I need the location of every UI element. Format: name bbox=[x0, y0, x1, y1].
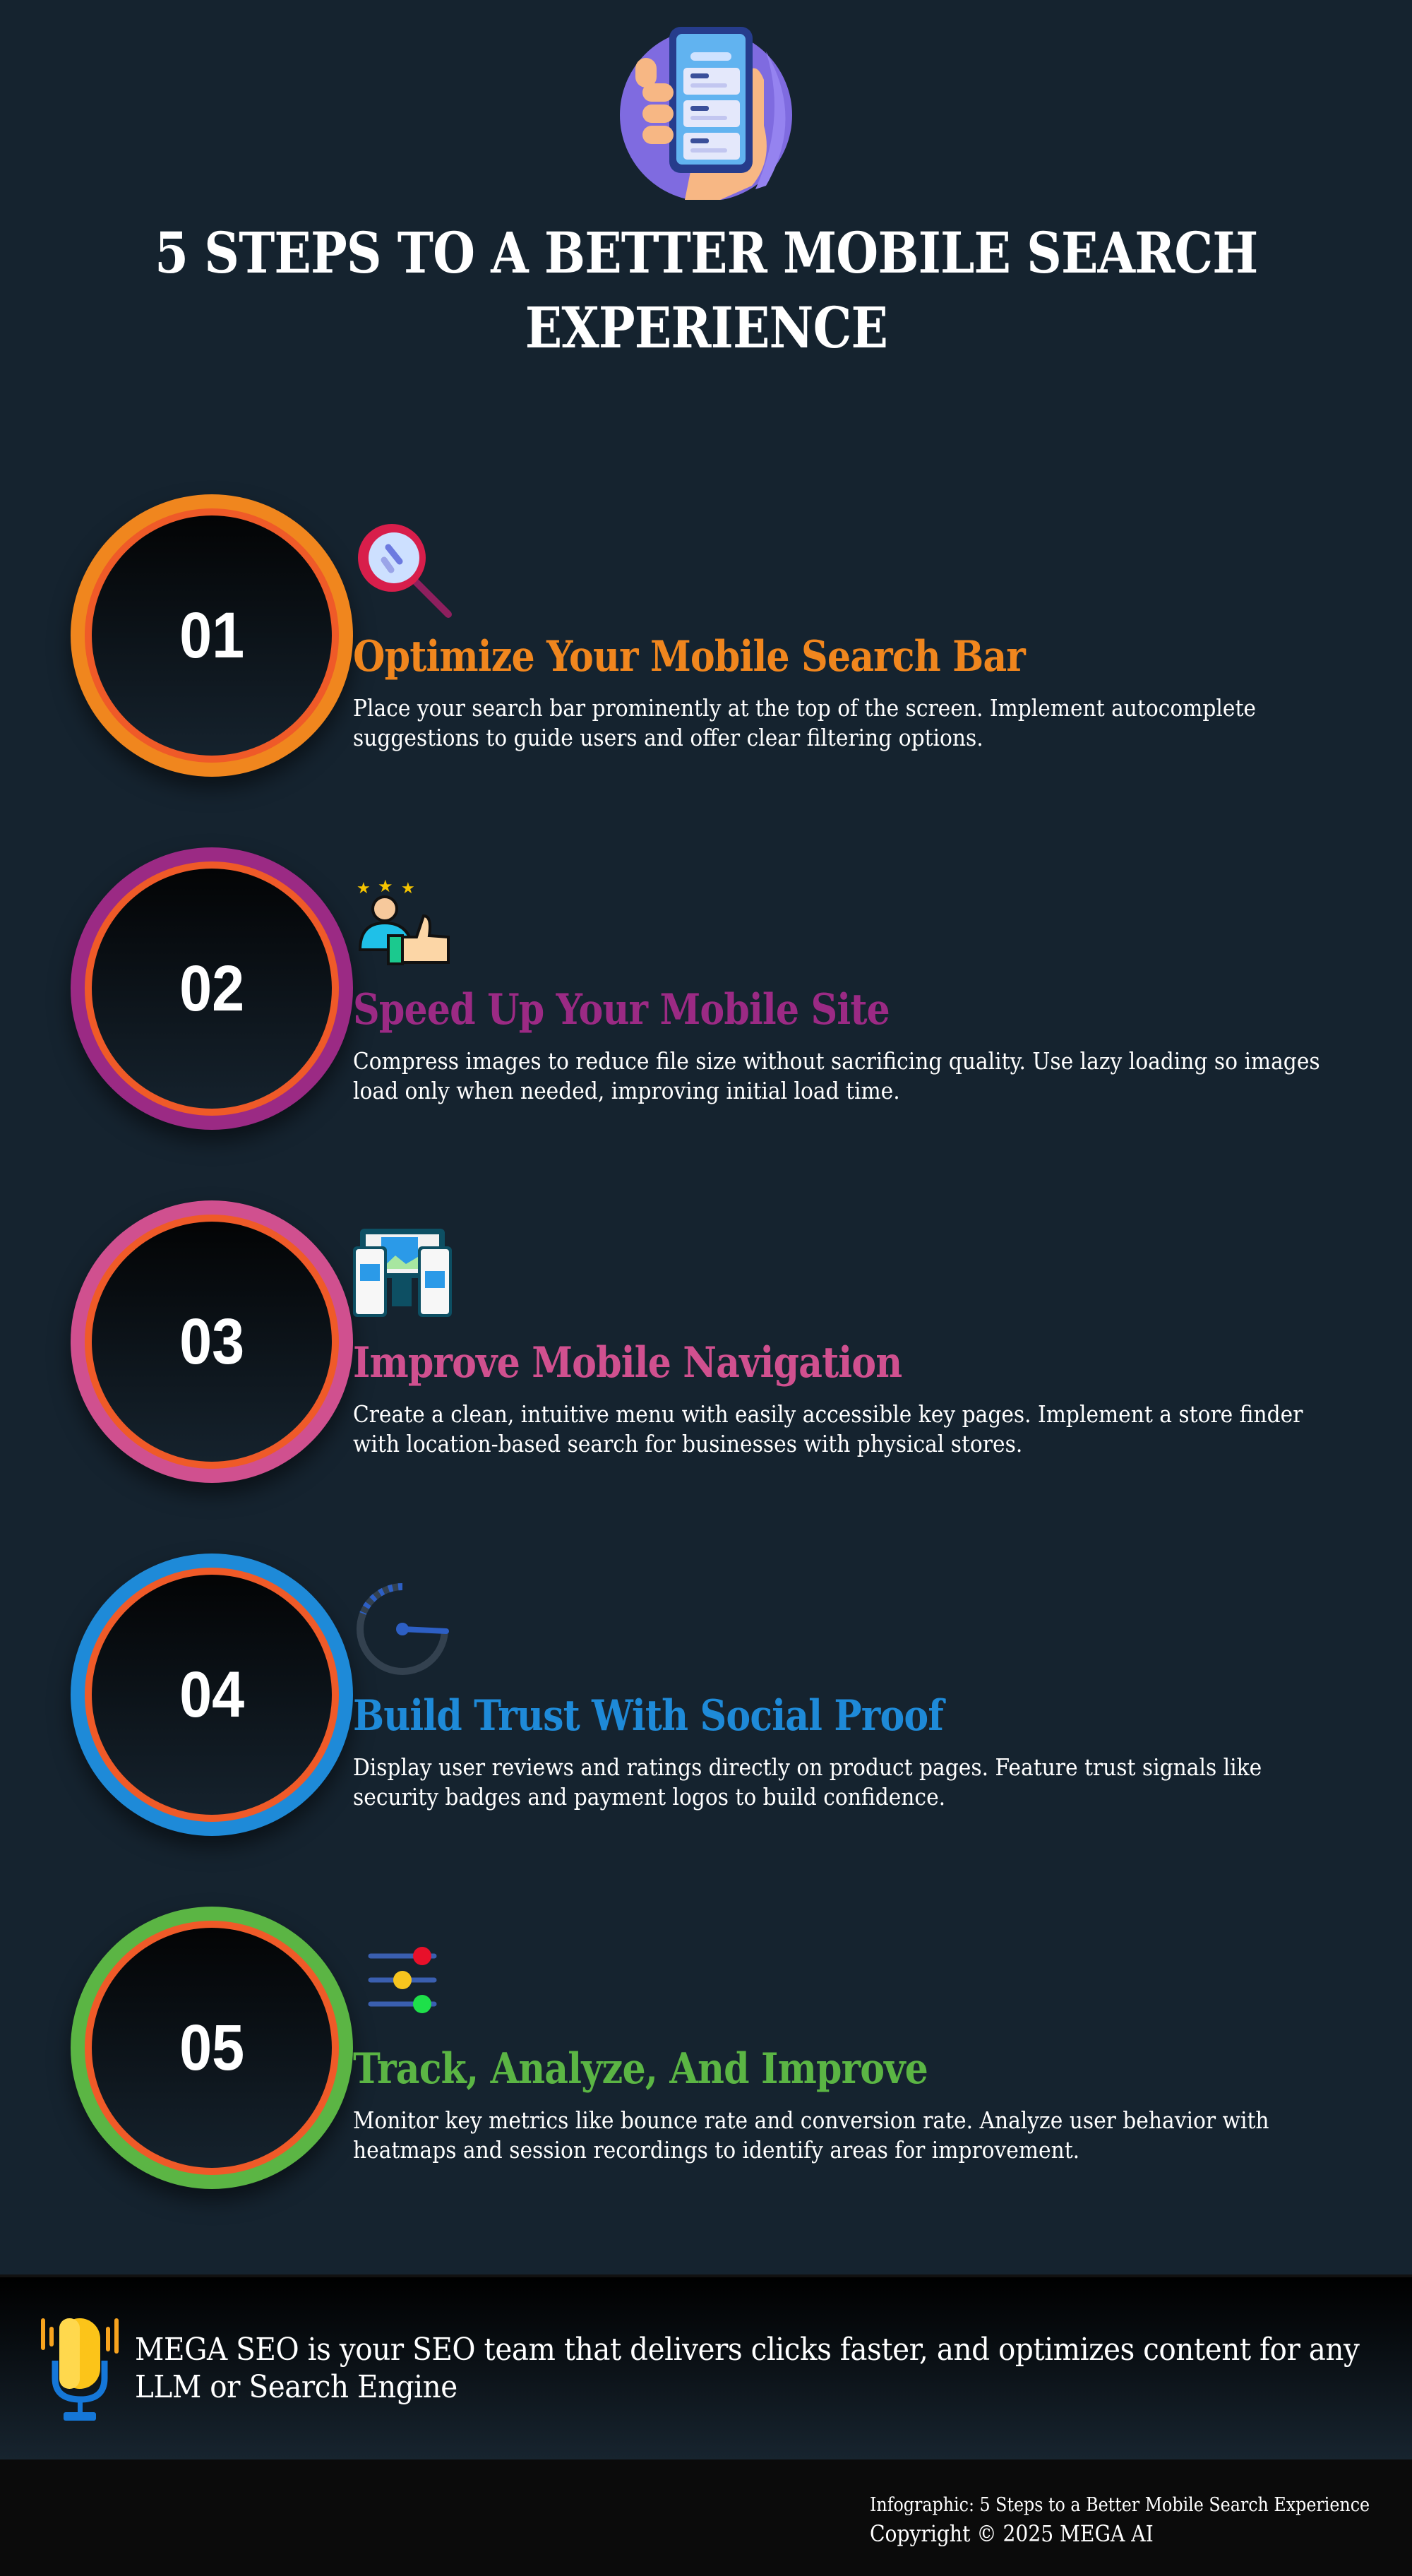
icon: sliders bbox=[369, 1947, 436, 2013]
credits bbox=[870, 2494, 1370, 2547]
circle 05 bbox=[71, 1907, 353, 2189]
circle 05: 05 bbox=[179, 2011, 244, 2083]
text 4: Display user reviews and ratings directly on product pages. Feature trust signals like security badges and payment logos to build confidence. bbox=[353, 1753, 1262, 1811]
circle 03 bbox=[71, 1200, 353, 1483]
circle 04: 04 bbox=[179, 1658, 244, 1730]
icon: user thumbs up: ★ bbox=[401, 880, 415, 898]
text 3: Create a clean, intuitive menu with easily accessible key pages. Implement a store finder with location-based search for businesses with physical stores. bbox=[353, 1400, 1303, 1457]
bottom bar bbox=[0, 2459, 1412, 2576]
icon: magnifier bbox=[358, 524, 452, 618]
heading 5: Track, Analyze, And Improve bbox=[353, 2044, 928, 2094]
circle 02: 02 bbox=[179, 952, 244, 1024]
title: 5 STEPS TO A BETTER MOBILE SEARCH bbox=[155, 220, 1257, 286]
header icon: hand holding phone bbox=[620, 27, 792, 200]
step 1 bbox=[66, 494, 1256, 792]
step 2 bbox=[66, 847, 1320, 1145]
icon: microphone bbox=[41, 2318, 119, 2421]
icon: user thumbs up: ★ bbox=[357, 880, 371, 898]
footer text: MEGA SEO is your SEO team that delivers clicks faster, and optimizes content for any LLM or Search Engine bbox=[135, 2332, 1359, 2405]
heading 4: Build Trust With Social Proof bbox=[353, 1691, 943, 1741]
title bbox=[155, 220, 1257, 361]
icon: devices bbox=[353, 1229, 452, 1317]
circle 01: 01 bbox=[179, 599, 244, 671]
circle 03: 03 bbox=[179, 1305, 244, 1377]
step 5 bbox=[66, 1907, 1269, 2205]
heading 1: Optimize Your Mobile Search Bar bbox=[353, 632, 1025, 681]
icon: user thumbs up bbox=[357, 876, 450, 965]
credits: Copyright © 2025 MEGA AI bbox=[870, 2520, 1154, 2547]
circle 01 bbox=[71, 494, 353, 777]
footer banner bbox=[0, 2274, 1412, 2459]
heading 2: Speed Up Your Mobile Site bbox=[353, 985, 890, 1034]
text 1: Place your search bar prominently at the top of the screen. Implement autocomplete suggestions to guide users and offer clear filtering options. bbox=[353, 694, 1256, 751]
credits: Infographic: 5 Steps to a Better Mobile Search Experience bbox=[870, 2494, 1370, 2516]
heading 3: Improve Mobile Navigation bbox=[353, 1338, 902, 1388]
icon: user thumbs up: ★ bbox=[378, 876, 393, 896]
title: EXPERIENCE bbox=[525, 294, 887, 361]
circle 02 bbox=[71, 847, 353, 1130]
step 3 bbox=[66, 1200, 1303, 1498]
circle 04 bbox=[71, 1554, 353, 1836]
step 4 bbox=[66, 1554, 1262, 1852]
text 2: Compress images to reduce file size without sacrificing quality. Use lazy loading so images load only when needed, improving initial load time. bbox=[353, 1047, 1320, 1104]
icon: speed gauge bbox=[357, 1583, 449, 1675]
text 5: Monitor key metrics like bounce rate and conversion rate. Analyze user behavior with heatmaps and session recordings to identify areas for improvement. bbox=[353, 2106, 1269, 2164]
